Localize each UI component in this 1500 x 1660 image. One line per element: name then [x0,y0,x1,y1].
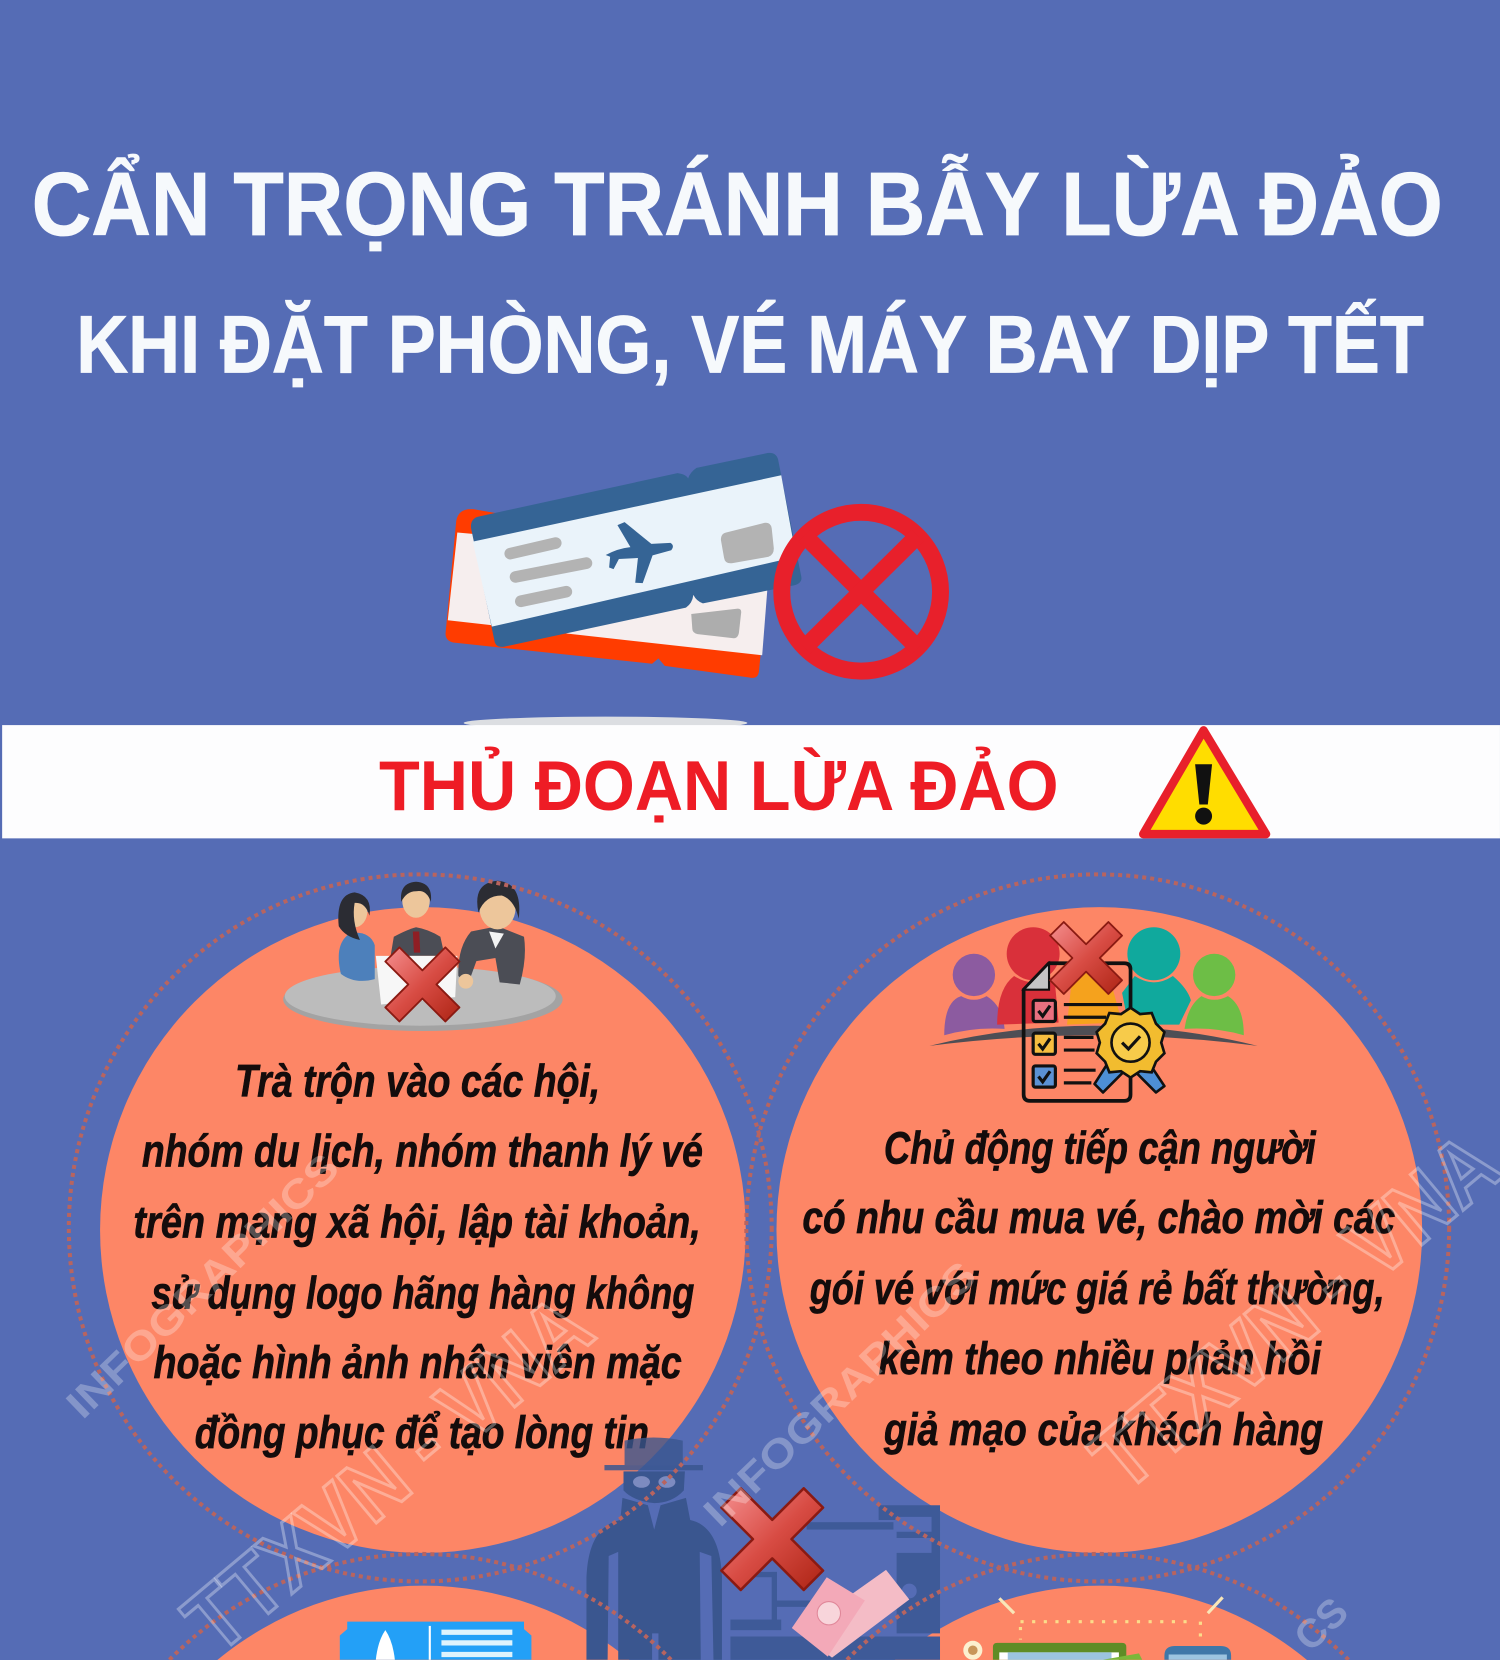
panel: direct approach [776,907,1422,1553]
panel: lower right tactic [895,1586,1307,1660]
icon: red cross [721,1488,823,1590]
icon: crowd and certified checklist [929,922,1258,1101]
icon: red cross [385,947,459,1021]
icon: warning triangle [1143,730,1266,834]
text block: first tactic: đồng phục để tạo lòng tin [195,1407,649,1458]
watermarks [58,1114,1500,1660]
watermarks: TTXVN - VNA [166,1276,610,1660]
text block: first tactic: sử dụng logo hãng hàng không [151,1267,695,1318]
watermarks: CS [1285,1589,1357,1660]
text block: second tactic: giả mạo của khách hàng [883,1404,1323,1455]
watermarks: INFOGRAPHICS [58,1145,348,1427]
dotted ring frames [69,874,1449,1660]
text block: first tactic: hoặc hình ảnh nhân viên mặc [154,1337,682,1388]
title [32,153,1443,391]
text block: first tactic [133,1056,703,1458]
banner: section heading [2,725,1500,838]
text block: second tactic [802,1122,1395,1455]
text block: first tactic: trên mạng xã hội, lập tài khoản, [133,1196,701,1247]
icon: cancelled air tickets [446,453,941,729]
text block: second tactic: Chủ động tiếp cận người [884,1122,1317,1173]
icon: red cross [1050,922,1122,994]
panel: fake group [100,881,746,1553]
text block: second tactic: kèm theo nhiều phản hồi [879,1333,1322,1384]
banner: section heading: THỦ ĐOẠN LỪA ĐẢO [379,746,1059,826]
icon: scammer at computer [586,1437,940,1660]
icon: people at table [283,881,563,1031]
icon: blue ticket [340,1622,531,1660]
panel: lower left tactic [217,1586,630,1660]
text block: first tactic: Trà trộn vào các hội, [235,1056,600,1107]
watermarks: INFOGRAPHICS [695,1253,985,1535]
icon: online booking devices [963,1597,1231,1660]
text block: first tactic: nhóm du lịch, nhóm thanh lý vé [142,1126,703,1177]
